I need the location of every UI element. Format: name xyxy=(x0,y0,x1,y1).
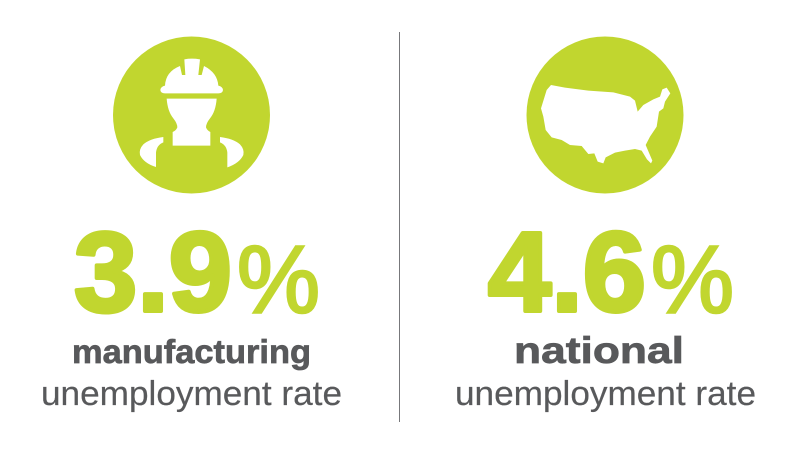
stat: 4.6% xyxy=(488,209,734,335)
stat: 3.9%: 3.9 xyxy=(74,209,232,335)
divider xyxy=(399,32,400,422)
label: unemployment rate: unemployment rate xyxy=(41,375,342,413)
label: national: national xyxy=(514,330,684,371)
panel: national xyxy=(455,36,756,413)
icon: construction worker xyxy=(113,36,270,194)
stat: 3.9% xyxy=(74,209,320,335)
stat: 4.6%: % xyxy=(651,226,734,334)
icon: map of USA xyxy=(526,36,684,194)
label: unemployment rate: unemployment rate xyxy=(455,375,756,413)
stat: 4.6%: 4.6 xyxy=(488,209,646,335)
stat: 3.9%: % xyxy=(237,226,320,334)
label: manufacturing: manufacturing xyxy=(72,333,311,370)
panel: manufacturing xyxy=(41,36,342,413)
